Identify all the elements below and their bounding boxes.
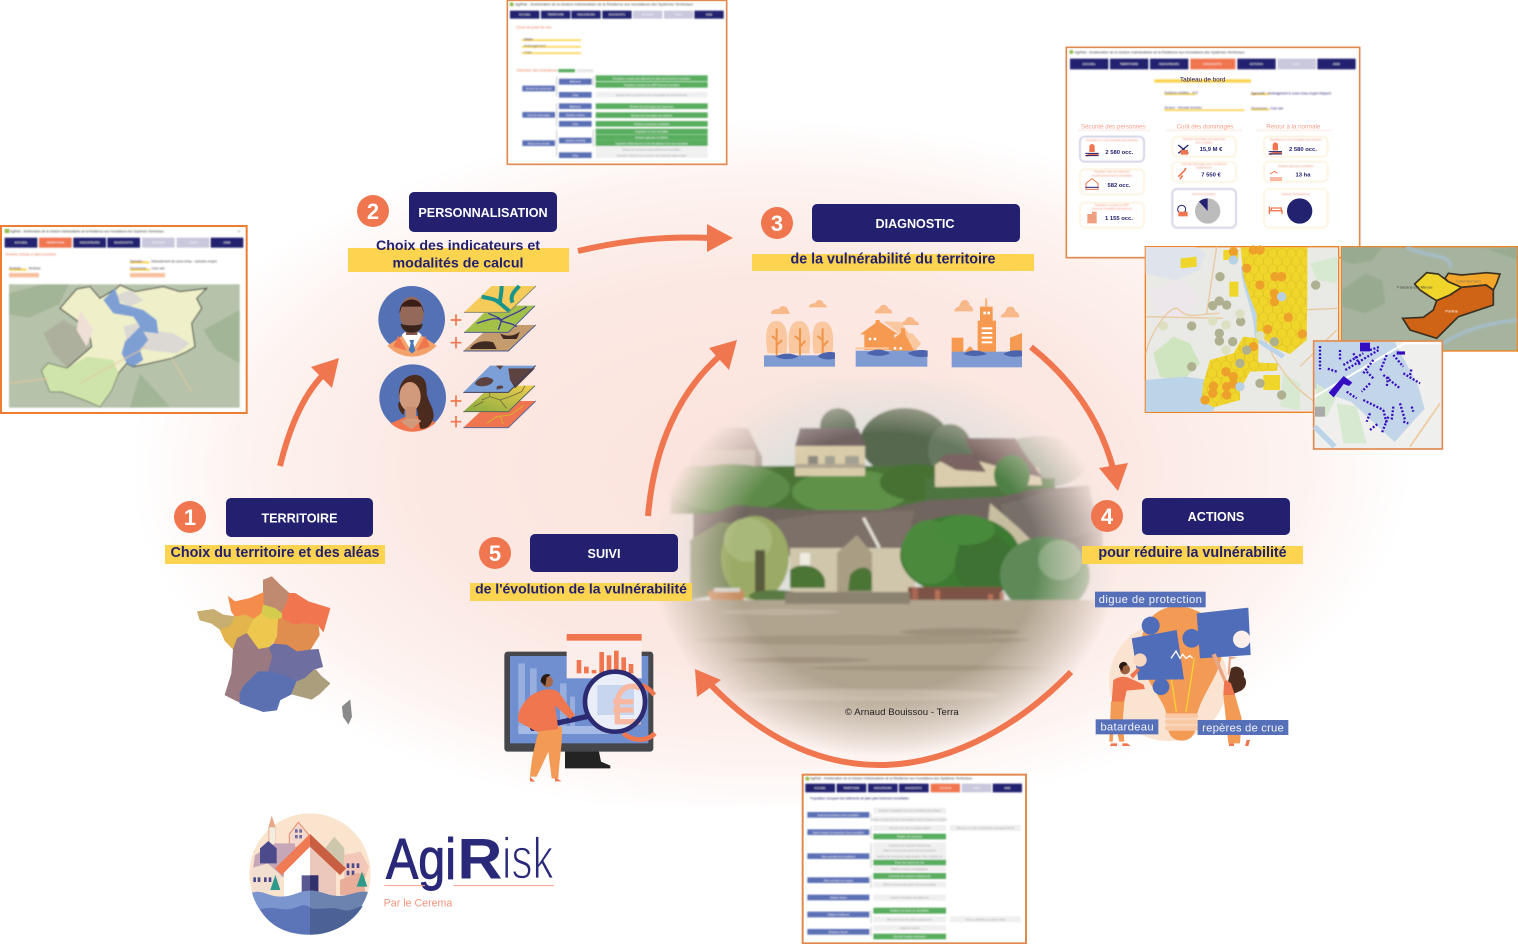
screenshot: territoire window: DIAGNOSTIC xyxy=(114,241,134,245)
screenshot: diagnostic dashboard window: SUIVI xyxy=(1293,62,1301,66)
step 1 heading: 1 xyxy=(184,505,196,530)
monitor xyxy=(504,652,653,768)
map: vulnerability by district: Ponthe xyxy=(1445,309,1459,314)
logo wordmark xyxy=(384,826,554,910)
screenshot: diagnostic dashboard window: Occurrence : Crue rare xyxy=(1251,107,1284,111)
step 2 heading: Choix des indicateurs et xyxy=(376,238,540,254)
suivi illustration: monitor and magnifier xyxy=(504,634,655,782)
screenshot: personnalisation window: Crise xyxy=(572,94,579,97)
screenshot: personnalisation window: Surfaces à urbaniser inondables xyxy=(634,123,670,126)
persona: man xyxy=(378,286,445,357)
screenshot: actions window: INDICATEURS xyxy=(874,786,892,790)
screenshot: personnalisation window: Coût des dommages xyxy=(527,114,551,117)
screenshot: territoire window: AIDE xyxy=(224,241,230,245)
screenshot: diagnostic dashboard window: professionnel xyxy=(1196,165,1212,169)
step 2 heading: modalités de calcul xyxy=(393,256,523,272)
screenshot: diagnostic dashboard window: Agencéité : Aménagement & cours d'eau moyen-fréquent xyxy=(1251,92,1331,96)
screenshot: actions window: Supprimer l'accès xyxy=(900,927,920,930)
persona: woman xyxy=(379,364,446,432)
screenshot: actions window: ACTIONS xyxy=(939,786,951,790)
screenshot: personnalisation window: Espace situé à la portée de crise susceptibles de déclenchement xyxy=(616,94,688,97)
screenshot: territoire window: SUIVI xyxy=(189,241,197,245)
plus signs xyxy=(451,314,461,427)
screenshot: territoire window: Territoire d'étude et aléa considéré xyxy=(5,253,56,257)
step 3 heading xyxy=(752,204,1034,271)
screenshot: diagnostic dashboard window: Population dans des bâtiments xyxy=(1094,170,1131,174)
screenshot: diagnostic dashboard window xyxy=(1066,47,1360,258)
step 1 heading: Choix du territoire et des aléas xyxy=(171,545,380,561)
step 3 heading: DIAGNOSTIC xyxy=(875,217,955,231)
flood photograph xyxy=(665,386,1104,752)
map: hexagon vulnerability grid xyxy=(1145,245,1339,412)
screenshot: diagnostic dashboard window: Secteur : Sécurité territoire xyxy=(1164,106,1202,110)
screenshot: actions window: Construire des supports institutionnels xyxy=(889,844,931,847)
arrow: suivi to diagnostic xyxy=(648,340,737,516)
screenshot: diagnostic dashboard window: Coût des dommages xyxy=(1177,124,1233,131)
photo: large green tree xyxy=(900,515,1020,597)
map: exposed buildings xyxy=(1314,341,1442,449)
map of the territory xyxy=(9,284,240,408)
step 5 heading: SUIVI xyxy=(588,547,620,561)
screenshot: diagnostic dashboard window: AgiRisk - Amélioration de la Gestion Individualisée de la Résilience aux Inondations des Systèmes Territoriaux xyxy=(1075,50,1245,54)
data layers for woman xyxy=(463,366,536,428)
screenshot: diagnostic dashboard window: ACCUEIL xyxy=(1083,62,1096,66)
screenshot: personnalisation window: Montant des dommages aux activités xyxy=(631,114,673,117)
photo: willow tree xyxy=(721,516,789,602)
step 4 heading: pour réduire la vulnérabilité xyxy=(1098,545,1287,561)
screenshot: diagnostic dashboard window: 7 550 € xyxy=(1201,172,1221,178)
screenshot: personnalisation window: INDICATEURS xyxy=(577,13,595,17)
photo: floodwater xyxy=(665,590,1104,752)
map: vulnerability by district xyxy=(1341,247,1518,351)
screenshot: personnalisation window: Système territorial xyxy=(565,140,586,143)
screenshot: personnalisation window: Bâtiments xyxy=(570,105,582,108)
screenshot: personnalisation window: Population habitant une commune sans dispositif réglementaire xyxy=(617,154,687,157)
screenshot: actions window: Adapter le bâtiment xyxy=(828,914,849,917)
screenshot: diagnostic dashboard window: Coût des dommages aux logements xyxy=(1183,137,1226,141)
screenshot: diagnostic dashboard window: (hors mobilier) xyxy=(1196,140,1213,144)
label: batardeau: batardeau xyxy=(1100,722,1154,734)
screenshot: diagnostic dashboard window: AIDE xyxy=(1333,62,1340,66)
screenshot: actions window: Réaliser une étude de vulnérabilité xyxy=(891,910,929,913)
screenshot: personnalisation window: Crise xyxy=(572,123,579,126)
screenshot: actions window: AgiRisk - Amélioration de la Gestion Individualisée de la Résilience aux Inondations des Systèmes Territoriaux xyxy=(810,777,973,781)
step 5 heading: de l'évolution de la vulnérabilité xyxy=(475,580,687,596)
screenshot: personnalisation window: ACCUEIL xyxy=(519,13,531,17)
label: batardeau xyxy=(1096,719,1158,734)
screenshot: diagnostic dashboard window: TERRITOIRE xyxy=(1120,62,1138,66)
step 3 heading: de la vulnérabilité du territoire xyxy=(791,252,996,268)
arrow: diagnostic to actions xyxy=(1031,347,1128,491)
screenshot: diagnostic dashboard window: 1 155 occ. xyxy=(1105,216,1133,222)
dashboard mini icons and pies xyxy=(1085,142,1312,224)
puzzle pieces xyxy=(1132,608,1251,695)
screenshot: diagnostic dashboard window: Surfaces agricoles inondables xyxy=(1278,164,1314,168)
screenshot: diagnostic dashboard window: 582 occ. xyxy=(1107,183,1131,189)
screenshot: actions window: Améliorer l'anticipation par une surveillance plus efficace xyxy=(879,810,941,813)
screenshot: actions window: Restaurer l'accès xyxy=(829,931,849,934)
France regions map xyxy=(197,577,352,724)
screenshot: personnalisation window: Montant des dommages aux logements xyxy=(630,105,674,108)
screenshot: diagnostic dashboard window: Tableau de bord xyxy=(1180,76,1226,83)
step 4 heading: 4 xyxy=(1101,504,1114,529)
screenshot: personnalisation window: AgiRisk - Amélioration de la Gestion Individualisée de la Résilience aux Inondations des Systèmes Territoriaux xyxy=(515,3,693,7)
screenshot: personnalisation window: Capacités d'hébergement et de relocalisation hors zone inondable xyxy=(615,142,689,145)
screenshot: personnalisation window: AIDE xyxy=(706,13,712,17)
icon: forest xyxy=(764,300,835,367)
screenshot: actions window: Adapter l'occupation des bâtiments xyxy=(890,897,930,900)
screenshot: actions window: AIDE xyxy=(1004,786,1011,790)
step 1 heading: TERRITOIRE xyxy=(261,512,338,526)
icon: city xyxy=(952,298,1022,367)
screenshot: territoire window: Occurrence : xyxy=(130,267,148,271)
screenshot: actions window: ACCUEIL xyxy=(814,786,826,790)
screenshot: diagnostic dashboard window: Population en zone inondable (permanente) xyxy=(1086,138,1138,142)
icon: village xyxy=(856,305,928,367)
screenshot: diagnostic dashboard window: ACTIONS xyxy=(1250,62,1263,66)
photo: right flowering tree xyxy=(999,536,1090,602)
screenshot: actions window: Population occupant des bâtiments de plain-pied fortement inondables xyxy=(810,797,909,801)
screenshot: diagnostic dashboard window: Population occupant un ERP xyxy=(1095,203,1129,207)
personas and data layers xyxy=(378,286,536,432)
magnifier xyxy=(533,672,645,732)
screenshot: actions window: Avant la survenance d'une inondation xyxy=(818,814,860,817)
screenshot: actions window: Disposer d'un plan communal de sauvegarde (PCS) xyxy=(957,827,1014,830)
screenshot: diagnostic dashboard window: 15,9 M € xyxy=(1200,147,1223,153)
background glow xyxy=(100,120,1440,805)
person right xyxy=(1212,653,1250,746)
screenshot: personnalisation window: TERRITOIRE xyxy=(548,13,564,17)
step 2 heading: 2 xyxy=(367,199,379,224)
screenshot: actions window: Mise hors d'eau de certains équipements xyxy=(887,918,933,921)
screenshot: diagnostic dashboard window: INDICATEURS xyxy=(1159,62,1179,66)
screenshot: personnalisation window: Sélection des indicateurs : xyxy=(517,69,559,73)
screenshot: actions window: Savoir intégrer la survenance d'une inondation xyxy=(813,831,865,834)
analyst figure xyxy=(518,674,575,782)
step 3 heading: 3 xyxy=(771,211,783,236)
logo emblem xyxy=(249,813,371,935)
vulnerability landscape icons xyxy=(764,298,1022,367)
screenshot: personnalisation window: Sécurité des personnes xyxy=(526,88,552,91)
screenshot: personnalisation window: DIAGNOSTIC xyxy=(609,13,625,17)
screenshot: territoire window: Scénario : xyxy=(130,260,144,264)
map: vulnerability by district: Fraisans-sur-Meuse xyxy=(1397,285,1433,290)
screenshot: actions window: Adapter l'accès xyxy=(830,897,848,900)
screenshot: personnalisation window: Réseau de transports locaux affectés par l'inondation xyxy=(622,148,681,151)
logo wordmark: R xyxy=(457,827,502,891)
map: vulnerability by district: Saint-Bernard xyxy=(1456,278,1481,283)
arrow: actions to suivi xyxy=(695,669,1071,765)
screenshot: actions window: Mettre en oeuvre des actions de communication xyxy=(883,884,937,887)
screenshot: personnalisation window: Population occupant des bâtiments de plain-pied fortement inondables xyxy=(613,77,691,80)
screenshot: diagnostic dashboard window: Coût des dommages pour un actif non xyxy=(1181,162,1227,166)
screenshot: actions window: Poser des repères de crue xyxy=(895,862,925,865)
screenshot: actions window: Recycler l'espace d'activation xyxy=(893,936,926,939)
screenshot: territoire window: x xyxy=(238,229,240,233)
step 4 heading: ACTIONS xyxy=(1188,510,1244,524)
step 2 heading xyxy=(348,192,569,272)
AgiRisk logo xyxy=(249,813,554,935)
screenshot: diagnostic dashboard window: Capacité d'hébergement xyxy=(1281,192,1310,196)
screenshot: personnalisation window: Bâtiments xyxy=(570,81,582,84)
screenshot: territoire window: ACTIONS xyxy=(152,241,165,245)
screenshot: actions window: Mettre en place des bons intermédiaires pour les agences de bassin xyxy=(872,818,948,821)
screenshot: actions window: Construire des supports institutionnels xyxy=(889,875,931,878)
logo wordmark: isk xyxy=(502,826,554,891)
screenshot: diagnostic dashboard window: Solutions mobiles : 10 € xyxy=(1164,91,1198,95)
data layers for man xyxy=(463,286,536,351)
screenshot: personnalisation window xyxy=(507,0,727,164)
screenshot: territoire window: INDICATEURS xyxy=(80,241,100,245)
screenshot: personnalisation window: ACTIONS xyxy=(642,13,654,17)
screenshot: personnalisation window: Activités et biens xyxy=(566,114,585,117)
screenshot: actions window: Établir un zonéco cartographique xyxy=(891,868,929,871)
screenshot: diagnostic dashboard window: Part hors inondation xyxy=(1192,192,1216,196)
screenshot: diagnostic dashboard window: Retour à la normale xyxy=(1266,124,1321,131)
arrow: personnalisation to diagnostic xyxy=(578,224,733,252)
step 2 heading: PERSONNALISATION xyxy=(418,206,548,220)
screenshot: personnalisation window: Surfaces agricoles inondables xyxy=(635,137,669,140)
screenshot: personnalisation window: Population occupant des ERP fortement inondable xyxy=(624,84,680,87)
arrow: territoire to personnalisation xyxy=(280,358,339,466)
photo: house on the hill left xyxy=(795,428,866,476)
screenshot: actions window: SUIVI xyxy=(973,786,980,790)
screenshot: personnalisation window: SUIVI xyxy=(675,13,682,17)
euro sign xyxy=(623,685,655,740)
screenshot: diagnostic dashboard window: 13 ha xyxy=(1296,172,1311,178)
actions illustration: light bulb and puzzle xyxy=(1095,592,1288,746)
step 4 heading xyxy=(1082,498,1303,564)
step 1 heading xyxy=(165,498,385,564)
screenshot: diagnostic dashboard window: 2 580 occ. xyxy=(1289,147,1317,153)
screenshot: actions window xyxy=(803,775,1026,943)
screenshot: territoire window: ACCUEIL xyxy=(15,241,28,245)
screenshot: personnalisation window: Crise xyxy=(524,50,532,54)
screenshot: diagnostic dashboard window: fortement inondable (permanente) xyxy=(1092,207,1132,211)
screenshot: diagnostic dashboard window: 2 580 occ. xyxy=(1105,150,1134,156)
person left xyxy=(1109,662,1145,746)
screenshot: personnalisation window: Choix du point de vue xyxy=(516,25,551,29)
screenshot: territoire window: Crue rare xyxy=(151,267,165,271)
screenshot: diagnostic dashboard window: Sécurité des personnes xyxy=(1081,124,1146,131)
screenshot: diagnostic dashboard window: Population en zone inondable (permanente) xyxy=(1270,138,1322,142)
chart panel xyxy=(567,634,642,678)
screenshot: actions window: Réaliser des documents réglementaires : PAC, DICRIM, etc xyxy=(877,856,943,859)
screenshot: territoire window: Territoire : xyxy=(9,267,23,271)
screenshot: actions window: Disposer d'un plan de gestion adapté xyxy=(889,827,931,830)
screenshot: actions window: Créer un abri/filtre ou espace refuge xyxy=(965,918,1006,921)
label: digue de protection: digue de protection xyxy=(1099,594,1202,606)
screenshot: actions window: Mettre en oeuvre des actions de communication xyxy=(883,850,937,853)
label: repères de crue: repères de crue xyxy=(1202,722,1284,734)
photo credit: © Arnaud Bouissou - Terra xyxy=(845,707,959,718)
photo: house on the hill right xyxy=(935,438,1043,495)
screenshot: actions window: Faire connaître les risques xyxy=(824,879,854,882)
screenshot: territoire window: AgiRisk - Amélioration de la Gestion Individualisée de la Résilience aux Inondations des Systèmes Territoriaux xyxy=(10,229,164,233)
logo wordmark: Par le Cerema xyxy=(384,898,452,910)
screenshot: actions window: Réaliser des exercices xyxy=(897,836,923,839)
screenshot: actions window: DIAGNOSTIC xyxy=(905,786,922,790)
screenshot: actions window: TERRITOIRE xyxy=(843,786,860,790)
step 5 heading: 5 xyxy=(489,541,501,566)
screenshot: personnalisation window: Retour à la normale xyxy=(528,142,550,145)
screenshot: personnalisation window: Crise xyxy=(572,154,579,157)
screenshot: personnalisation window: Métier xyxy=(524,37,534,41)
screenshot: personnalisation window: Aménagement xyxy=(524,44,546,48)
screenshot: territoire window xyxy=(1,226,247,413)
screenshot: personnalisation window: Population en zone inondable xyxy=(635,131,669,134)
screenshot: territoire window: Territoire xyxy=(28,267,41,271)
screenshot: diagnostic dashboard window: de plain-pied fortement inondables xyxy=(1092,173,1133,177)
screenshot: territoire window: Débordement de cours d'eau - scénario moyen xyxy=(151,260,217,264)
screenshot: actions window: Faire connaître les inondations xyxy=(821,855,856,858)
screenshot: territoire window: TERRITOIRE xyxy=(46,241,64,245)
logo wordmark: Agi xyxy=(386,827,456,891)
screenshot: diagnostic dashboard window: DIAGNOSTIC xyxy=(1203,62,1223,66)
step 5 heading xyxy=(470,534,692,601)
light bulb xyxy=(1140,607,1222,741)
